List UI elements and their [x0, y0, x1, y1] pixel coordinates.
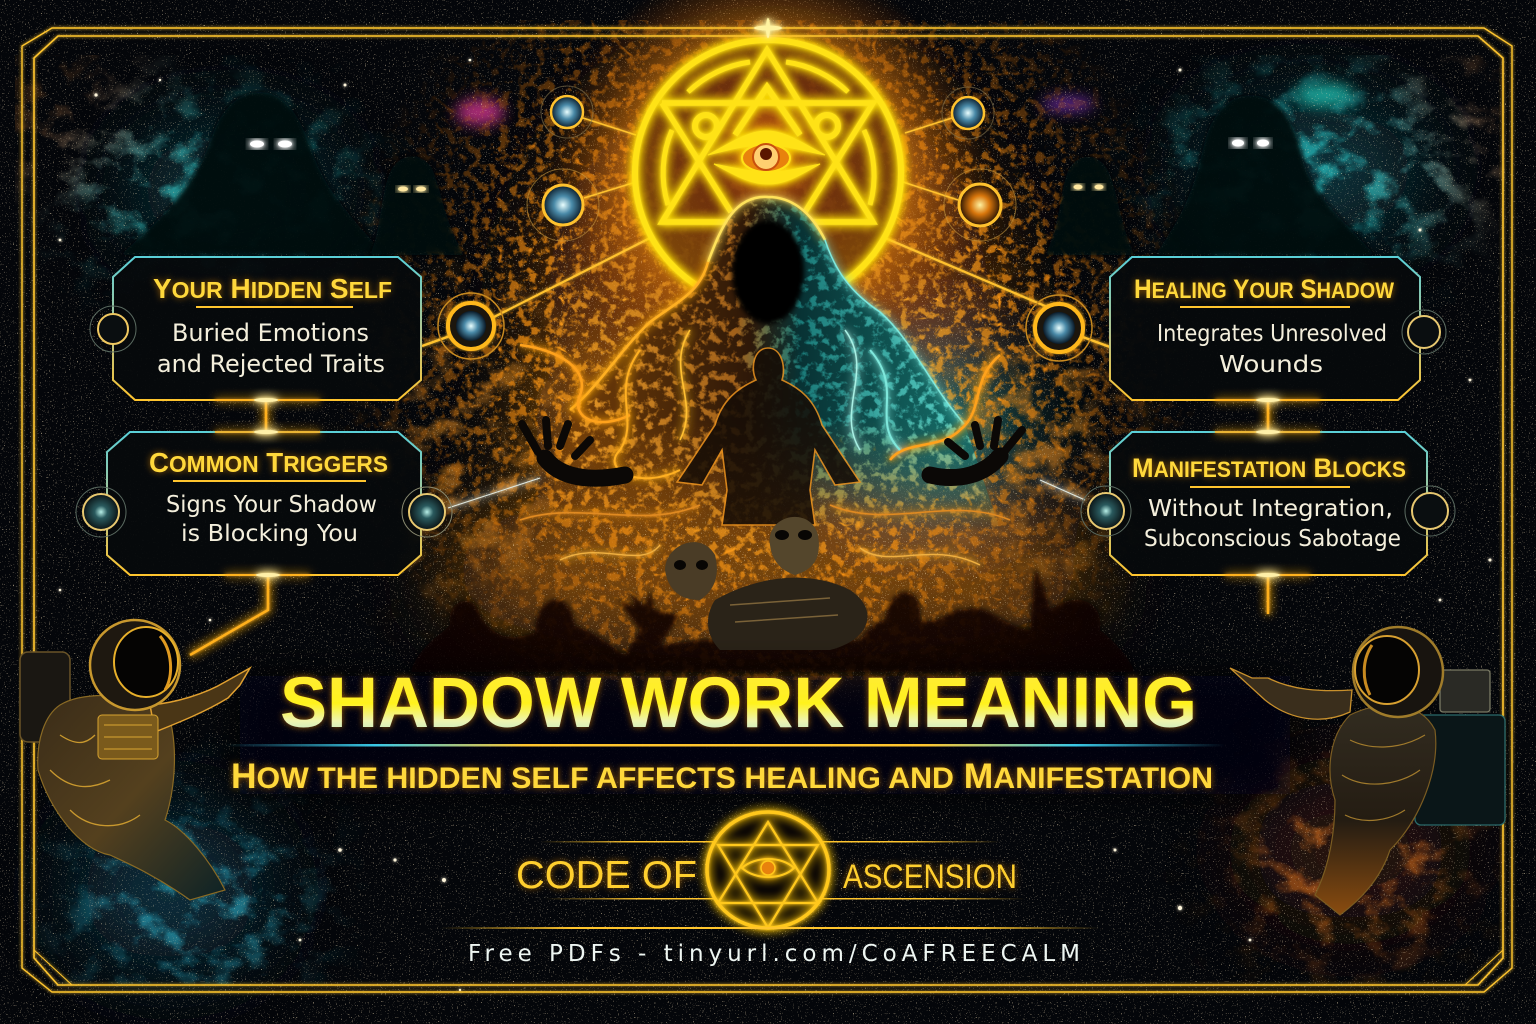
orbiting orb mid-right — [944, 169, 1016, 241]
node: healing large orb — [1026, 295, 1092, 361]
panel: manifestation blocks — [1110, 432, 1427, 575]
brand word: ascension: ASCENSION — [843, 858, 1017, 896]
divider — [1180, 306, 1350, 308]
emblem: small sacred star — [707, 812, 829, 928]
panel: common triggers — [107, 432, 421, 575]
body text: is Blocking You — [181, 521, 358, 547]
astronaut right pointing — [1230, 627, 1505, 915]
hooded shadow figure top-left small — [370, 156, 465, 255]
brand logo: code of ascension — [516, 812, 1025, 928]
body text: Wounds — [1219, 352, 1323, 378]
divider — [173, 480, 366, 482]
heading: common triggers: COMMON TRIGGERS — [149, 447, 388, 478]
hooded shadow figure top-left large — [120, 92, 385, 255]
divider — [196, 306, 353, 308]
orbiting orb mid-left — [527, 169, 599, 241]
node: right panel 2 left — [1081, 486, 1131, 536]
panel: your hidden self — [113, 257, 421, 400]
astronaut left pointing — [20, 620, 250, 900]
hooded shadow figure top-right large — [1155, 95, 1375, 255]
crowd of reaching shadow figures — [410, 517, 1135, 672]
hooded shadow figure top-right small — [1045, 156, 1135, 255]
body text: Integrates Unresolved — [1157, 321, 1387, 347]
brand word: code of: CODE OF — [516, 854, 697, 897]
golden sacred geometry emblem with eye — [635, 40, 901, 306]
heading: healing your shadow: HEALING YOUR SHADOW — [1134, 274, 1394, 304]
body text: Subconscious Sabotage — [1144, 526, 1401, 552]
left open hand — [522, 420, 625, 478]
subtitle: HOW THE HIDDEN SELF AFFECTS HEALING AND MANIFESTATION — [231, 757, 1213, 796]
orbiting orb top-right — [942, 87, 994, 139]
heading: your hidden self: YOUR HIDDEN SELF — [153, 273, 392, 304]
body text: and Rejected Traits — [157, 350, 385, 378]
node: right panel 1 right — [1402, 310, 1446, 354]
title underline — [225, 744, 1225, 746]
vertical connectors between panels — [190, 400, 1320, 655]
glowing energy tendrils around figure — [520, 330, 1010, 565]
right open hand — [930, 420, 1022, 478]
body text: Buried Emotions — [172, 319, 369, 347]
orbiting orb top-left — [541, 86, 593, 138]
inner glowing meditating figure — [677, 348, 860, 525]
footer divider — [440, 927, 1100, 929]
central hooded figure — [545, 197, 1000, 530]
footer link: Free PDFs - tinyurl.com/CoAFREECALM — [468, 941, 1080, 967]
heading: manifestation blocks: MANIFESTATION BLOCKS — [1132, 453, 1406, 483]
node: hidden self large orb — [438, 293, 504, 359]
node: right panel 2 right — [1405, 486, 1455, 536]
frame top star — [754, 18, 782, 38]
divider — [1190, 486, 1350, 488]
title: SHADOW WORK MEANING — [280, 664, 1197, 743]
body text: Without Integration, — [1148, 496, 1393, 522]
panel: healing your shadow — [1110, 257, 1420, 400]
connector rays from emblem to nodes — [422, 118, 1110, 347]
node: left panel 1 left — [90, 306, 136, 352]
body text: Signs Your Shadow — [166, 492, 377, 518]
connector junction flares — [254, 398, 1280, 577]
dark band behind title — [240, 676, 1290, 794]
node: left panel 2 left — [76, 487, 126, 537]
node: left panel 2 right — [402, 487, 452, 537]
